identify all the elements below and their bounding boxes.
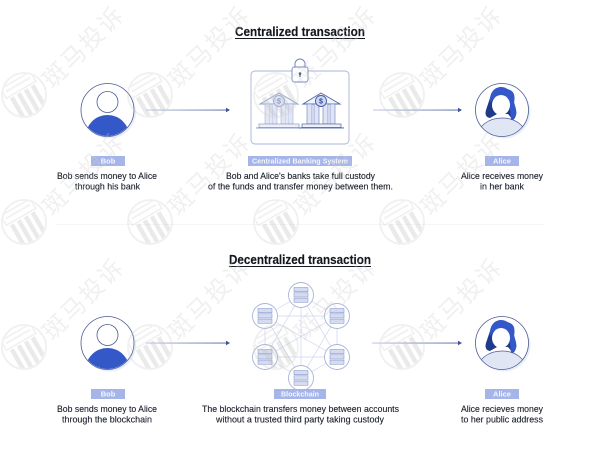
watermark: row 1 col 3: 斑马投诉 (290, 1, 382, 94)
arrow: Bob to blockchain (146, 341, 230, 345)
label: Bob: Bob (101, 157, 116, 166)
text: banks description (208, 171, 393, 192)
watermark: row 2 col 1 (1, 128, 130, 250)
icon: left bank (256, 93, 301, 128)
icon: Bob avatar (80, 83, 136, 138)
watermark: row 3 col 3 (253, 253, 382, 375)
text: banks description: of the funds and transfer money between them. (208, 182, 393, 192)
watermark: row 2 col 3 (253, 128, 382, 250)
icon: Bob avatar (80, 316, 136, 372)
text: Bob description (57, 404, 157, 424)
panel: centralized Bob (57, 84, 157, 192)
text: blockchain description: without a trusted third party taking custody (215, 414, 384, 424)
network connections (265, 295, 337, 378)
label: Blockchain (274, 389, 326, 399)
text: Alice description: in her bank (480, 182, 524, 192)
node: lower right (324, 344, 350, 370)
node: upper right (324, 304, 350, 328)
arrow: Bob to banks (146, 108, 230, 112)
text: Bob description: Bob sends money to Alice (57, 404, 157, 414)
label: Alice: Alice (493, 390, 511, 399)
text: Alice description: Alice receives money (461, 171, 543, 181)
text: Alice description: to her public address (461, 414, 543, 424)
watermark: row 3 col 2 (127, 253, 256, 375)
watermark: row 3 col 1 (1, 253, 130, 375)
watermark: row 3 col 4 (379, 253, 508, 375)
watermark: row 2 col 1: 斑马投诉 (38, 128, 130, 221)
label: Bob: Bob (101, 390, 116, 399)
panel: centralized banking system (208, 59, 393, 192)
watermark: row 1 col 3 (253, 1, 382, 123)
arrow: blockchain to Alice (372, 341, 462, 345)
node: upper left (252, 304, 278, 328)
icon: padlock (292, 59, 308, 82)
label: Alice: Alice (493, 157, 511, 166)
arrow: banks to Alice (373, 108, 462, 112)
watermark: row 3 col 4: 斑马投诉 (416, 253, 508, 346)
text: blockchain description: The blockchain transfers money between accounts (202, 404, 399, 414)
node: bottom (288, 366, 314, 390)
icon: left bank: $ (277, 98, 281, 106)
watermark: row 2 col 4 (379, 128, 508, 250)
icon: right bank: $ (319, 98, 323, 106)
watermark: row 2 col 4: 斑马投诉 (416, 128, 508, 221)
watermark: row 2 col 2 (127, 128, 256, 250)
watermark: row 1 col 1: 斑马投诉 (38, 1, 130, 94)
node: lower left (252, 344, 278, 370)
watermark: row 1 col 2: 斑马投诉 (164, 1, 256, 94)
text: Bob description: through his bank (75, 182, 140, 192)
watermark: row 3 col 3: 斑马投诉 (290, 253, 382, 346)
watermark: row 3 col 1: 斑马投诉 (38, 253, 130, 346)
title: decentralized transaction: Decentralized transaction (229, 252, 371, 267)
text: blockchain description (202, 404, 399, 424)
panel: centralized Alice (461, 84, 543, 192)
panel: blockchain network (202, 282, 399, 424)
text: Bob description (57, 171, 157, 192)
label: Centralized Banking System: Centralized Banking System (252, 157, 348, 166)
watermark: row 1 col 4 (379, 1, 508, 123)
text: Bob description: through the blockchain (62, 414, 152, 424)
title: centralized transaction: Centralized transaction (235, 24, 365, 39)
watermark: row 1 col 4: 斑马投诉 (416, 1, 508, 94)
label: Blockchain: Blockchain (281, 390, 319, 399)
icon: Alice avatar (475, 83, 530, 138)
panel: decentralized Bob (57, 316, 157, 424)
bank frame (251, 71, 349, 144)
watermark: row 2 col 3: 斑马投诉 (290, 128, 382, 221)
text: Bob description: Bob sends money to Alice (57, 171, 157, 181)
watermark: row 3 col 2: 斑马投诉 (164, 253, 256, 346)
watermark: row 2 col 2: 斑马投诉 (164, 128, 256, 221)
watermark: row 1 col 2 (127, 1, 256, 123)
icon: Alice avatar (475, 316, 530, 372)
panel: decentralized Alice (461, 316, 543, 424)
text: banks description: Bob and Alice's banks take full custody (226, 171, 375, 181)
text: Alice description: Alice recieves money (461, 404, 543, 414)
node: top (288, 282, 314, 308)
text: Alice description (461, 171, 543, 192)
icon: right bank (299, 93, 344, 128)
text: Alice description (461, 404, 543, 424)
watermark: row 1 col 1 (1, 1, 130, 123)
